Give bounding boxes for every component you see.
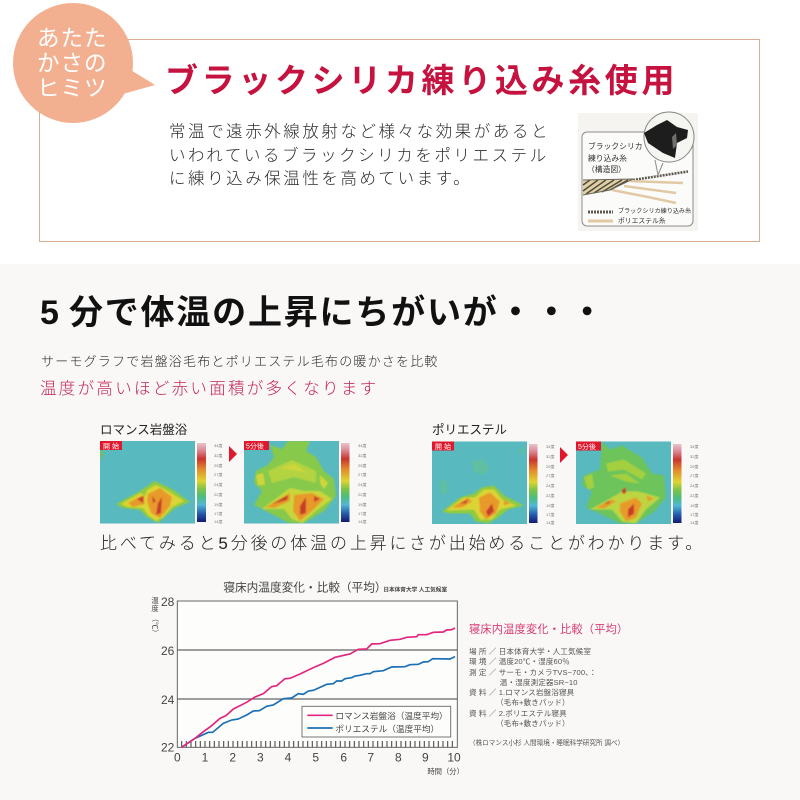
colour scale 2: 14度 xyxy=(358,518,366,524)
text block: comparison result: 比べてみると5分後の体温の上昇にさが出始めることがわかります。 xyxy=(100,534,705,553)
colour scale 4: 34度 xyxy=(690,443,698,449)
colour scale 3 xyxy=(529,443,554,525)
y axis title: （℃） xyxy=(151,615,160,637)
title: ブラックシリカ練り込み糸使用 xyxy=(165,62,678,99)
colour scale 1: 17度 xyxy=(214,510,222,516)
y axis labels: 24 xyxy=(161,693,175,707)
text block: description: 常温で遠赤外線放射など様々な効果があると xyxy=(169,123,550,141)
thermal image: romance start: 開 始 xyxy=(103,442,119,450)
y axis title: 温 xyxy=(151,596,159,605)
x axis title: 時間（分） xyxy=(427,767,464,776)
icon: speech bubble with label: かさの xyxy=(37,51,108,76)
colour scale 3: 19度 xyxy=(546,502,554,508)
colour scale 1 xyxy=(197,442,222,524)
y axis title xyxy=(151,596,160,637)
thermal comparison images xyxy=(100,422,698,525)
colour scale 4: 24度 xyxy=(690,482,698,488)
conditions list: 環 境 ／ 温度20℃・湿度60％ xyxy=(469,657,570,666)
colour scale 4: 19度 xyxy=(690,502,698,508)
illustration: black silica yarn structure: ブラックシリカ練り込み糸 xyxy=(618,207,691,215)
y axis labels xyxy=(161,595,175,755)
y axis title: 度 xyxy=(151,604,159,613)
conditions list: （毛布+敷きパッド） xyxy=(500,719,570,728)
y axis labels: 22 xyxy=(161,741,175,755)
colour scale 2: 32度 xyxy=(358,452,366,458)
colour scale 3: 22度 xyxy=(546,492,554,498)
conditions list: 資 料 ／ 1.ロマンス岩盤浴寝具 xyxy=(469,688,574,697)
x axis labels: 10 xyxy=(447,751,461,765)
thermal image: polyester after 5 min xyxy=(576,442,671,524)
arrow 1 xyxy=(229,446,237,462)
colour scale 4: 27度 xyxy=(690,472,698,478)
source note: （株ロマンス小杉 人間環境・睡眠科学研究所 調べ） xyxy=(469,740,624,747)
conditions list: 資 料 ／ 2.ポリエステル寝具 xyxy=(469,709,567,718)
x axis labels: 1 xyxy=(202,751,209,765)
x axis labels: 6 xyxy=(340,751,347,765)
colour scale 4: 17度 xyxy=(690,511,698,517)
series: romance xyxy=(182,628,455,747)
colour scale 1: 34度 xyxy=(214,442,222,448)
colour scale 2: 19度 xyxy=(358,501,366,507)
illustration: black silica yarn structure: ブラックシリカ xyxy=(588,141,643,151)
colour scale 2: 29度 xyxy=(358,462,366,468)
legend xyxy=(302,706,451,737)
thermal image: romance start xyxy=(100,441,195,524)
colour scale 2: 17度 xyxy=(358,510,366,516)
text block: test conditions xyxy=(469,623,628,747)
thermal image: polyester start: 開 始 xyxy=(435,442,451,451)
colour scale 4 xyxy=(673,443,698,525)
illustration: black silica yarn structure: 練り込み糸 xyxy=(588,153,627,163)
y axis labels: 28 xyxy=(161,595,175,609)
panel: lower beige background xyxy=(0,264,800,800)
colour scale 2: 34度 xyxy=(358,442,366,448)
text block: description: に練り込み保温性を高めています。 xyxy=(169,170,472,188)
thermal image: romance after 5 min: 5分後 xyxy=(246,442,264,450)
icon: speech bubble with label: ヒミツ xyxy=(37,76,108,101)
text block: pink note: 温度が高いほど赤い面積が多くなります xyxy=(40,380,378,398)
x axis labels xyxy=(174,751,461,765)
icon: speech bubble with label: あたた xyxy=(37,26,108,51)
colour scale 4: 22度 xyxy=(690,492,698,498)
thermal image: polyester after 5 min: 5分後 xyxy=(578,442,596,451)
x axis labels: 4 xyxy=(285,751,292,765)
colour scale 1: 22度 xyxy=(214,491,222,497)
colour scale 2: 22度 xyxy=(358,491,366,497)
legend: ロマンス岩盤浴（温度平均） xyxy=(335,710,448,721)
colour scale 3: 24度 xyxy=(546,482,554,488)
conditions list: 温・湿度測定器SR−10 xyxy=(500,678,578,687)
colour scale 3: 32度 xyxy=(546,453,554,459)
colour scale 4: 32度 xyxy=(690,453,698,459)
y axis labels: 26 xyxy=(161,644,175,658)
colour scale 1: 29度 xyxy=(214,462,222,468)
colour scale 2 xyxy=(341,442,366,524)
x axis labels: 9 xyxy=(422,751,429,765)
legend: ポリエステル（温度平均） xyxy=(335,723,439,734)
colour scale 3: 29度 xyxy=(546,463,554,469)
panel: secret callout frame xyxy=(39,39,760,242)
colour scale 3: 34度 xyxy=(546,443,554,449)
colour scale 1: 27度 xyxy=(214,471,222,477)
x axis labels: 8 xyxy=(395,751,402,765)
colour scale 4: 14度 xyxy=(690,519,698,525)
colour scale 3: 27度 xyxy=(546,472,554,478)
conditions list: 場 所 ／ 日本体育大学・人工気候室 xyxy=(469,647,591,656)
thermal image: romance after 5 min xyxy=(244,441,339,524)
x axis labels: 2 xyxy=(229,751,236,765)
chart title: 寝床内温度変化・比較（平均） xyxy=(223,581,387,595)
chart title xyxy=(223,581,447,595)
illustration: black silica yarn structure xyxy=(578,112,698,231)
series: polyester xyxy=(182,657,455,747)
chart title: 日本体育大学 人工気候室 xyxy=(383,585,447,593)
conditions list: 測 定 ／ サーモ・カメラTVS−700、： xyxy=(469,668,597,677)
conditions list: （毛布+敷きパッド） xyxy=(500,698,570,707)
illustration: black silica yarn structure: ポリエステル糸 xyxy=(618,216,666,225)
label: polyester: ポリエステル xyxy=(432,423,507,437)
colour scale 1: 24度 xyxy=(214,481,222,487)
heading: 5 分で体温の上昇にちがいが・・・ xyxy=(40,294,606,332)
conditions list xyxy=(469,647,597,728)
colour scale 2: 27度 xyxy=(358,471,366,477)
colour scale 3: 14度 xyxy=(546,519,554,525)
text block: description: いわれているブラックシリカをポリエステル xyxy=(169,147,549,165)
text block: thermography intro: サーモグラフで岩盤浴毛布とポリエステル毛布の暖かさを比較 xyxy=(41,354,439,369)
colour scale 3: 17度 xyxy=(546,511,554,517)
icon: speech bubble with label xyxy=(13,3,155,123)
x axis labels: 3 xyxy=(257,751,264,765)
x axis labels: 7 xyxy=(367,751,374,765)
colour scale 1: 14度 xyxy=(214,518,222,524)
arrow 2 xyxy=(560,447,568,463)
line chart: bedding temperature change xyxy=(151,581,464,776)
text block: description xyxy=(169,123,550,188)
colour scale 1: 32度 xyxy=(214,452,222,458)
conditions heading: 寝床内温度変化・比較（平均） xyxy=(469,624,628,636)
plot area xyxy=(177,601,457,747)
x axis labels: 0 xyxy=(174,751,181,765)
colour scale 4: 29度 xyxy=(690,463,698,469)
label: romance: ロマンス岩盤浴 xyxy=(100,422,188,437)
colour scale 2: 24度 xyxy=(358,481,366,487)
colour scale 1: 19度 xyxy=(214,501,222,507)
thermal image: polyester start xyxy=(432,442,527,524)
x axis labels: 5 xyxy=(312,751,319,765)
illustration: black silica yarn structure: （構造図） xyxy=(587,164,626,174)
